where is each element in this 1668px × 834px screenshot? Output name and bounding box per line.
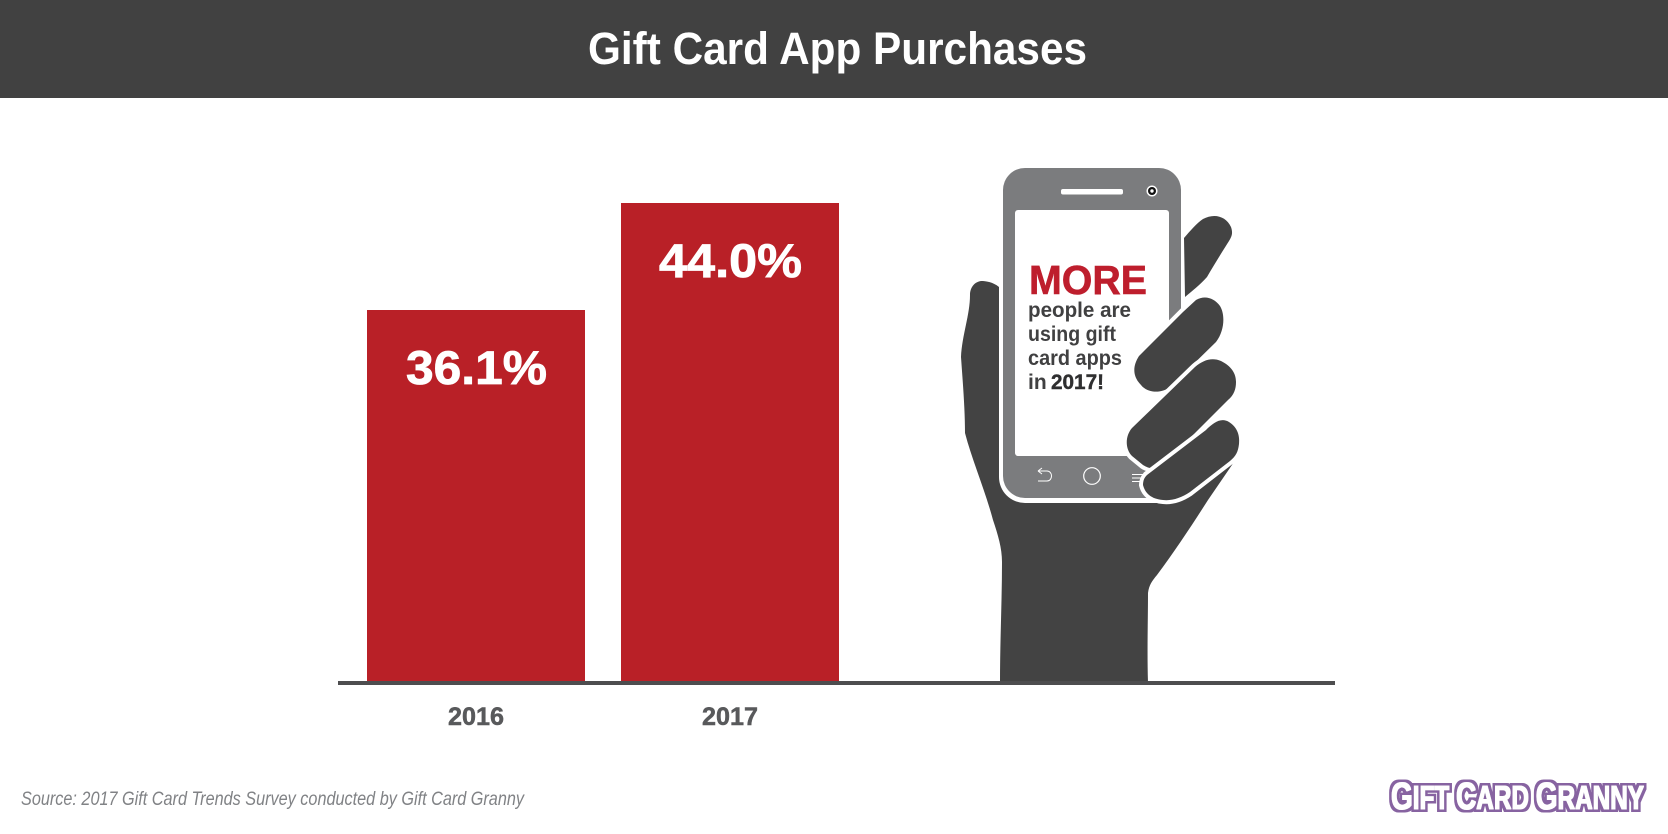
callout: phone screen text	[1028, 257, 1147, 394]
callout: phone screen text: in	[1028, 371, 1047, 394]
header band with title: Gift Card App Purchases	[588, 23, 1087, 74]
phone camera	[1146, 186, 1158, 196]
header band with title	[0, 0, 1668, 98]
phone back button	[1038, 468, 1052, 481]
bar: 2017: 44.0%	[659, 234, 802, 287]
phone screen	[1015, 210, 1169, 456]
phone body	[999, 164, 1185, 503]
callout: phone screen text: MORE	[1029, 257, 1147, 303]
index finger	[1184, 216, 1232, 297]
axis label: 2017: 2017	[702, 703, 758, 731]
bar: 2016: 36.1%	[406, 341, 547, 394]
axis label: 2016: 2016	[448, 703, 504, 731]
icon: hand holding phone	[961, 164, 1239, 683]
phone speaker	[1061, 189, 1123, 194]
callout: phone screen text: card apps	[1028, 347, 1122, 370]
little finger	[1143, 420, 1239, 500]
ring finger	[1127, 359, 1236, 468]
hand palm and thumb	[961, 281, 1234, 683]
callout: phone screen text: people are	[1028, 299, 1131, 322]
callout: phone screen text: 2017!	[1051, 371, 1104, 394]
bar chart	[367, 203, 839, 731]
phone home button	[1084, 468, 1100, 484]
middle finger	[1134, 298, 1223, 392]
logo: Gift Card Granny: GIFT CARD GRANNY	[1391, 776, 1644, 818]
callout: phone screen text: using gift	[1028, 323, 1116, 346]
phone menu button	[1132, 474, 1146, 482]
chart baseline	[338, 681, 1335, 685]
bar: 2017	[621, 203, 839, 681]
bar: 2016	[367, 310, 585, 681]
source note: Source: 2017 Gift Card Trends Survey conducted by Gift Card Granny	[21, 789, 525, 810]
